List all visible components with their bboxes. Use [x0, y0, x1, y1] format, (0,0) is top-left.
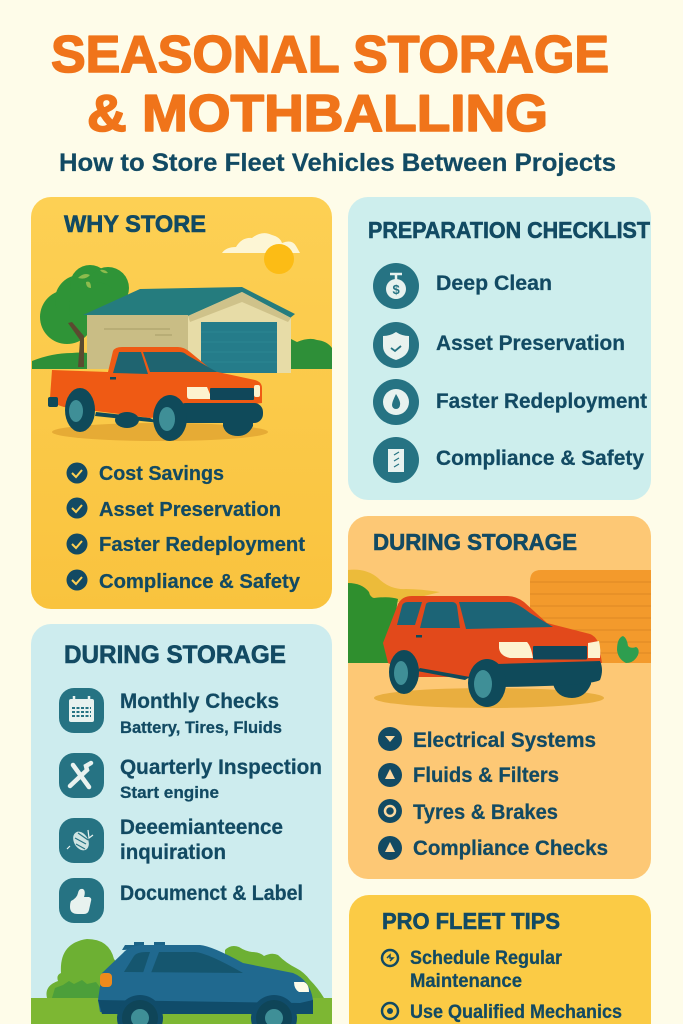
- heading: why store: WHY STORE: [64, 211, 206, 238]
- title: SEASONAL STORAGE: [51, 26, 609, 84]
- item: monthly checks: Battery, Tires, Fluids: [120, 718, 282, 737]
- checklist: why store: Asset Preservation: [99, 499, 281, 521]
- heading: during storage: DURING STORAGE: [64, 641, 286, 669]
- icon: drop gauge: [373, 379, 419, 425]
- tip: schedule regular maintenance: [382, 948, 563, 992]
- heading: preparation checklist: PREPARATION CHECKLIST: [368, 217, 650, 243]
- icon: shield: [373, 322, 419, 368]
- item: monthly checks: [120, 690, 282, 737]
- item: deep clean: Deep Clean: [436, 272, 552, 295]
- title: [51, 26, 609, 143]
- illustration: blue car with bushes: [31, 939, 332, 1024]
- checklist: why store: [66, 462, 305, 593]
- title: & MOTHBALLING: [87, 85, 548, 143]
- item: asset preservation: Asset Preservation: [436, 332, 625, 355]
- checklist: during storage systems: Tyres & Brakes: [413, 801, 558, 824]
- icon: calendar: [59, 688, 104, 733]
- item: quarterly inspection: Start engine: [120, 783, 219, 802]
- subtitle: How to Store Fleet Vehicles Between Projects: [59, 149, 616, 177]
- item: document and label: Documenct & Label: [120, 882, 303, 905]
- item: quarterly inspection: Quarterly Inspection: [120, 756, 322, 779]
- illustration: red suv: [348, 570, 651, 708]
- checklist: during storage systems: Fluids & Filters: [413, 764, 559, 787]
- checklist: why store: Compliance & Safety: [99, 571, 301, 593]
- heading: during storage: DURING STORAGE: [373, 529, 577, 555]
- illustration: garage and pickup truck: [32, 233, 332, 441]
- icon: stopwatch: [373, 263, 419, 309]
- tip: schedule regular maintenance: Schedule Regular: [410, 948, 563, 969]
- item: deeemianteence inquiration: Deeemianteence: [120, 816, 283, 839]
- icon: stopwatch: $: [392, 282, 400, 297]
- checklist: during storage systems: Compliance Checks: [413, 837, 608, 860]
- icon: document: [373, 437, 419, 483]
- icon: maintenance emblem: [59, 818, 104, 863]
- item: deeemianteence inquiration: [120, 816, 283, 864]
- icon: tools: [59, 753, 104, 798]
- checklist: during storage systems: [378, 727, 608, 860]
- checklist: why store: Faster Redeployment: [99, 534, 305, 556]
- item: faster redeployment: Faster Redeployment: [436, 390, 647, 413]
- item: quarterly inspection: [120, 756, 322, 802]
- panel: during storage systems: [348, 516, 651, 879]
- panel: preparation checklist: [348, 197, 651, 500]
- checklist: why store: Cost Savings: [99, 463, 224, 485]
- icon: thumbs up: [59, 878, 104, 923]
- item: deeemianteence inquiration: inquiration: [120, 841, 226, 864]
- panel: why store: [31, 197, 332, 609]
- item: compliance and safety: Compliance & Safety: [436, 447, 644, 470]
- tip: schedule regular maintenance: Maintenance: [410, 971, 522, 992]
- tip: use qualified mechanics: Use Qualified Mechanics: [410, 1002, 622, 1023]
- panel: during storage schedule: [31, 624, 332, 1024]
- item: monthly checks: Monthly Checks: [120, 690, 279, 713]
- heading: pro fleet tips: PRO FLEET TIPS: [382, 908, 560, 934]
- checklist: during storage systems: Electrical Systems: [413, 729, 596, 752]
- panel: pro fleet tips: [349, 895, 651, 1024]
